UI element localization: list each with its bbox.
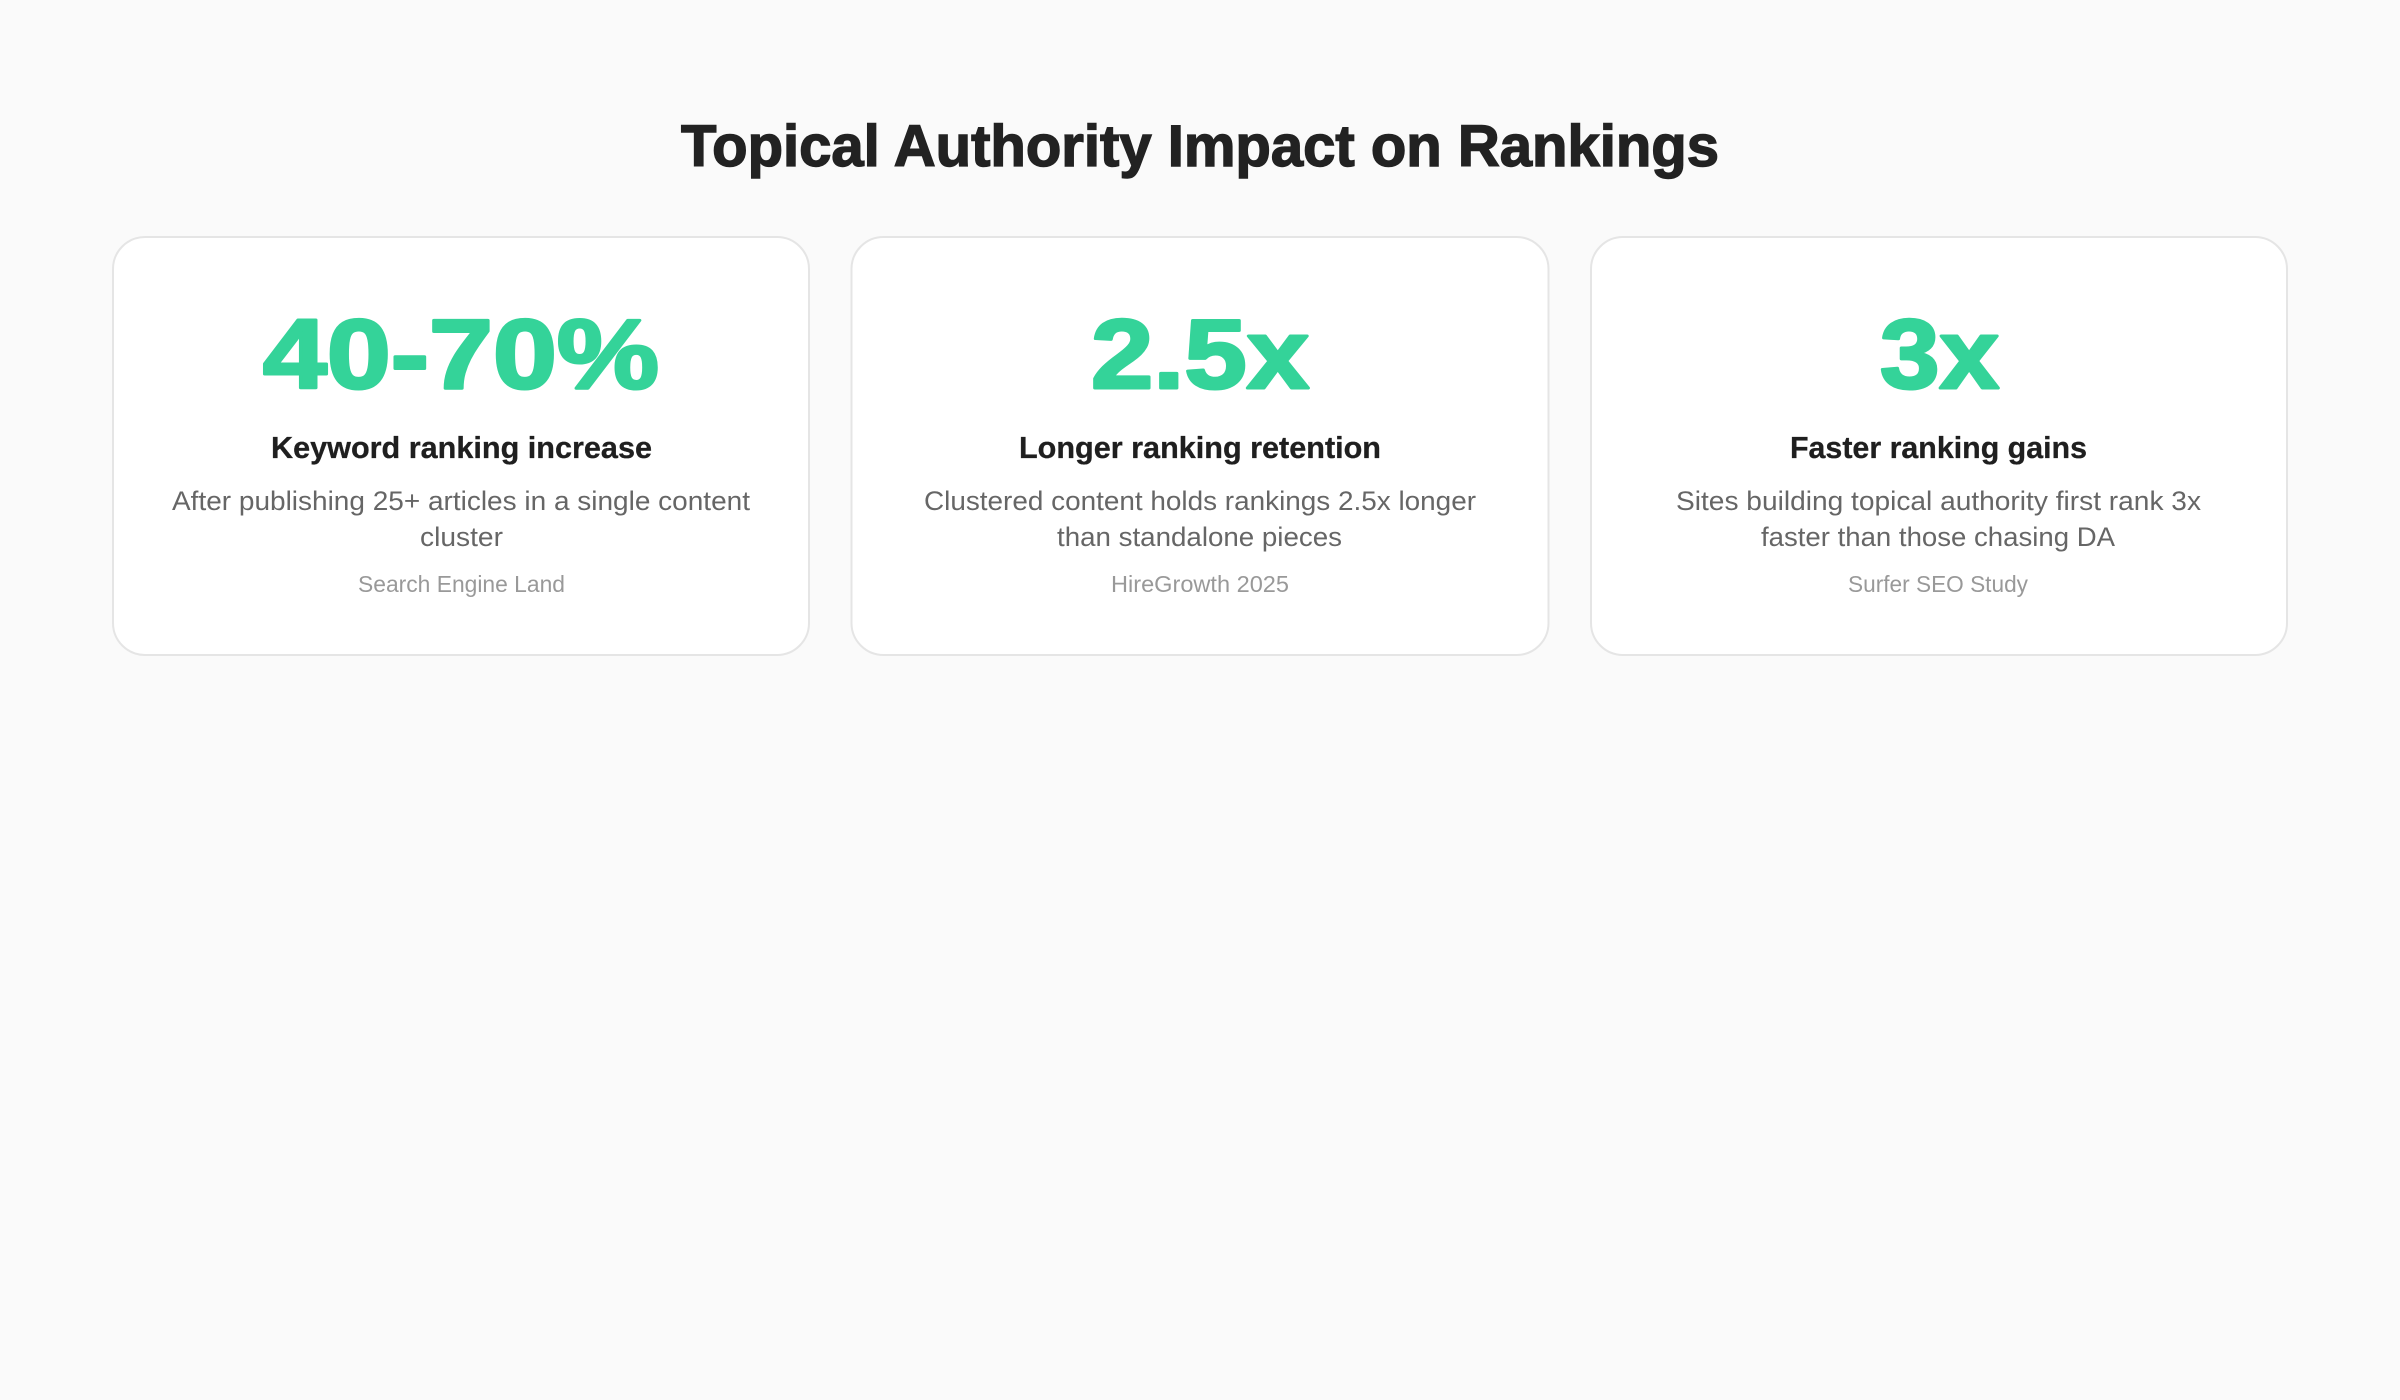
description: After publishing 25+ articles in a single content <box>172 486 751 516</box>
big stat: 3x: 3x <box>1880 299 1999 409</box>
source: Surfer SEO Study <box>1848 571 2028 597</box>
big stat: 40-70%: 40-70% <box>263 299 659 409</box>
description: cluster <box>420 522 503 552</box>
description: faster than those chasing DA <box>1761 522 2115 552</box>
panel: faster ranking gains <box>1591 237 2287 655</box>
card heading: Keyword ranking increase <box>271 430 652 465</box>
description: Clustered content holds rankings 2.5x longer <box>924 486 1476 516</box>
big stat: 2.5x: 2.5x <box>1091 299 1309 409</box>
panel: keyword ranking increase <box>113 237 809 655</box>
card background <box>113 237 809 655</box>
card background <box>852 237 1548 655</box>
card heading: Longer ranking retention <box>1019 430 1381 465</box>
source: HireGrowth 2025 <box>1111 571 1289 597</box>
description <box>924 486 1476 552</box>
description <box>1676 486 2202 552</box>
source: Search Engine Land <box>358 571 565 597</box>
description: than standalone pieces <box>1057 522 1342 552</box>
panel: longer ranking retention <box>852 237 1548 655</box>
title: Topical Authority Impact on Rankings <box>681 114 1719 179</box>
card heading: Faster ranking gains <box>1790 430 2087 465</box>
description <box>172 486 751 552</box>
card background <box>1591 237 2287 655</box>
description: Sites building topical authority first rank 3x <box>1676 486 2202 516</box>
